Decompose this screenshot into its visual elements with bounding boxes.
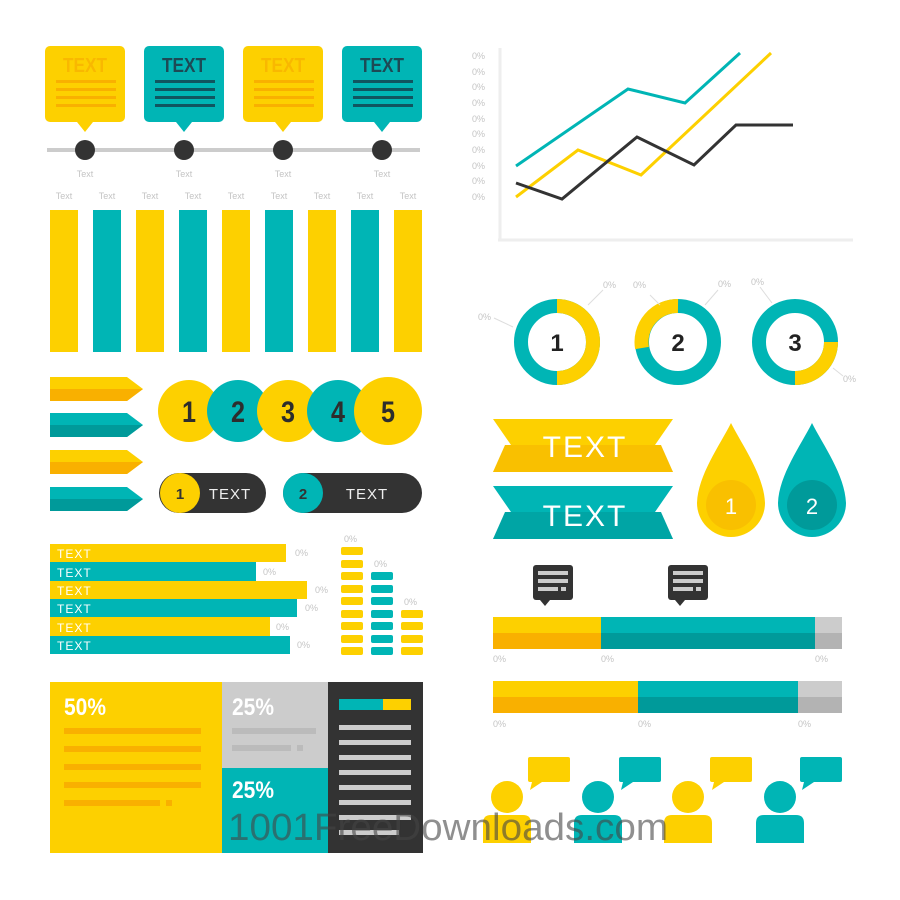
line chart: 0%	[472, 67, 485, 77]
numbered circles: 4	[331, 396, 345, 429]
vertical bar columns: Text	[271, 191, 288, 201]
progress bars: 0%	[493, 654, 506, 664]
donut charts: 0%	[718, 279, 731, 289]
donut charts: 0%	[603, 280, 616, 290]
donut charts	[478, 277, 856, 384]
percentage panel	[50, 682, 423, 853]
horizontal bar chart: TEXT	[57, 621, 92, 635]
people with speech bubbles	[483, 757, 842, 843]
vertical bar columns: Text	[228, 191, 245, 201]
progress bars: 0%	[493, 719, 506, 729]
vertical bar columns: Text	[142, 191, 159, 201]
vertical bar columns	[50, 191, 422, 352]
line chart: 0%	[472, 114, 485, 124]
pill labels: 1	[176, 486, 184, 503]
ribbons: TEXT	[543, 500, 627, 533]
timeline callouts: Text	[275, 169, 292, 179]
timeline callouts: Text	[176, 169, 193, 179]
progress bars: 0%	[638, 719, 651, 729]
line chart: 0%	[472, 145, 485, 155]
numbered circles: 1	[182, 396, 196, 429]
vertical bar columns: Text	[56, 191, 73, 201]
drops	[697, 423, 846, 537]
ribbons: TEXT	[543, 431, 627, 464]
line chart: 0%	[472, 176, 485, 186]
timeline callouts: Text	[374, 169, 391, 179]
percentage panel: 25%	[232, 694, 274, 721]
horizontal bar chart	[50, 544, 328, 654]
horizontal bar chart: TEXT	[57, 639, 92, 653]
stacked block chart: 0%	[404, 597, 417, 607]
line chart: 0%	[472, 161, 485, 171]
numbered circles: 2	[231, 396, 245, 429]
pill labels: 2	[299, 486, 307, 503]
timeline callouts	[45, 46, 422, 179]
donut charts: 0%	[478, 312, 491, 322]
callout 4: TEXT	[360, 55, 404, 77]
pill labels: TEXT	[346, 486, 388, 503]
timeline callouts: Text	[77, 169, 94, 179]
ribbons	[493, 419, 673, 539]
horizontal bar chart: TEXT	[57, 566, 92, 580]
horizontal bar chart: 0%	[297, 640, 310, 650]
progress bars: 0%	[601, 654, 614, 664]
horizontal bar chart: 0%	[295, 548, 308, 558]
drops: 2	[806, 494, 818, 519]
vertical bar columns: Text	[185, 191, 202, 201]
donut charts: 1	[550, 330, 564, 357]
line chart: 0%	[472, 82, 485, 92]
callout 2	[144, 46, 224, 132]
line chart: 0%	[472, 192, 485, 202]
numbered circles: 3	[281, 396, 295, 429]
progress bars	[493, 565, 842, 729]
line chart: 0%	[472, 129, 485, 139]
horizontal bar chart: TEXT	[57, 602, 92, 616]
arrow tabs	[50, 377, 143, 511]
pill labels: TEXT	[209, 486, 251, 503]
horizontal bar chart: TEXT	[57, 584, 92, 598]
callout 2: TEXT	[162, 55, 206, 77]
horizontal bar chart: 0%	[276, 622, 289, 632]
stacked block chart	[341, 534, 423, 655]
numbered circles: 5	[381, 396, 395, 429]
line chart: 0%	[472, 98, 485, 108]
callout 1: TEXT	[63, 55, 107, 77]
percentage panel: 25%	[232, 777, 274, 804]
donut charts: 0%	[633, 280, 646, 290]
callout 3	[243, 46, 323, 132]
line chart: 0%	[472, 51, 485, 61]
progress bars: 0%	[815, 654, 828, 664]
vertical bar columns: Text	[99, 191, 116, 201]
vertical bar columns: Text	[357, 191, 374, 201]
watermark: 1001FreeDownloads.com	[228, 807, 668, 849]
donut charts: 0%	[751, 277, 764, 287]
donut charts: 2	[671, 330, 685, 357]
stacked block chart: 0%	[344, 534, 357, 544]
progress bars: 0%	[798, 719, 811, 729]
callout 3: TEXT	[261, 55, 305, 77]
pill labels	[159, 473, 422, 513]
drops: 1	[725, 494, 737, 519]
horizontal bar chart: 0%	[315, 585, 328, 595]
donut charts: 3	[788, 330, 802, 357]
percentage panel: 50%	[64, 694, 106, 721]
donut charts: 0%	[843, 374, 856, 384]
vertical bar columns: Text	[314, 191, 331, 201]
numbered circles	[158, 377, 422, 445]
horizontal bar chart: TEXT	[57, 547, 92, 561]
horizontal bar chart: 0%	[305, 603, 318, 613]
stacked block chart: 0%	[374, 559, 387, 569]
line chart	[472, 48, 853, 240]
callout 4	[342, 46, 422, 132]
callout 1	[45, 46, 125, 132]
horizontal bar chart: 0%	[263, 567, 276, 577]
vertical bar columns: Text	[400, 191, 417, 201]
